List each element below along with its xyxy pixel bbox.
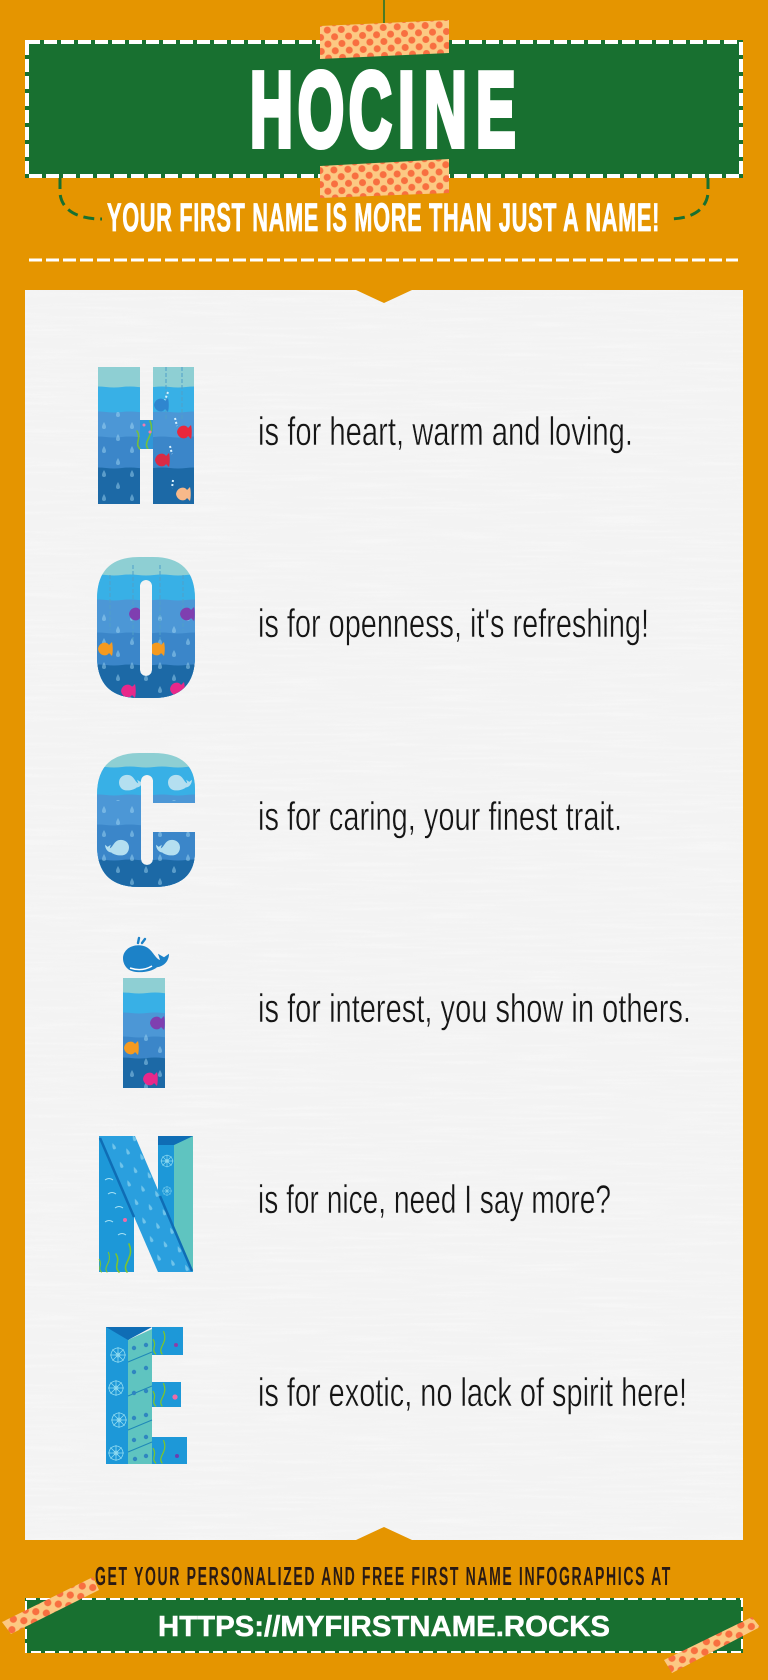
title: HOCINE <box>250 51 516 169</box>
icon: whale <box>123 938 169 972</box>
bracket: left curve <box>60 178 102 219</box>
bracket: right curve <box>668 178 708 219</box>
footer banner <box>25 1598 743 1653</box>
letter H <box>98 367 194 504</box>
letter C <box>97 753 195 887</box>
tape: banner top <box>320 20 449 59</box>
tape: footer left <box>2 1577 99 1634</box>
text: H meaning: is for heart, warm and loving. <box>258 410 633 454</box>
text: C meaning: is for caring, your finest trait. <box>258 795 622 839</box>
letter O <box>97 557 195 698</box>
letter E <box>106 1327 187 1464</box>
tape: banner bottom <box>320 159 449 198</box>
letter N <box>99 1136 193 1272</box>
hanging string <box>383 0 385 25</box>
footer url: HTTPS://MYFIRSTNAME.ROCKS <box>158 1611 610 1643</box>
tape: footer right <box>664 1617 760 1673</box>
letter I <box>115 938 179 1088</box>
title banner <box>25 40 743 178</box>
panel: letters and meanings <box>25 290 743 1540</box>
text: N meaning: is for nice, need I say more? <box>258 1178 611 1222</box>
